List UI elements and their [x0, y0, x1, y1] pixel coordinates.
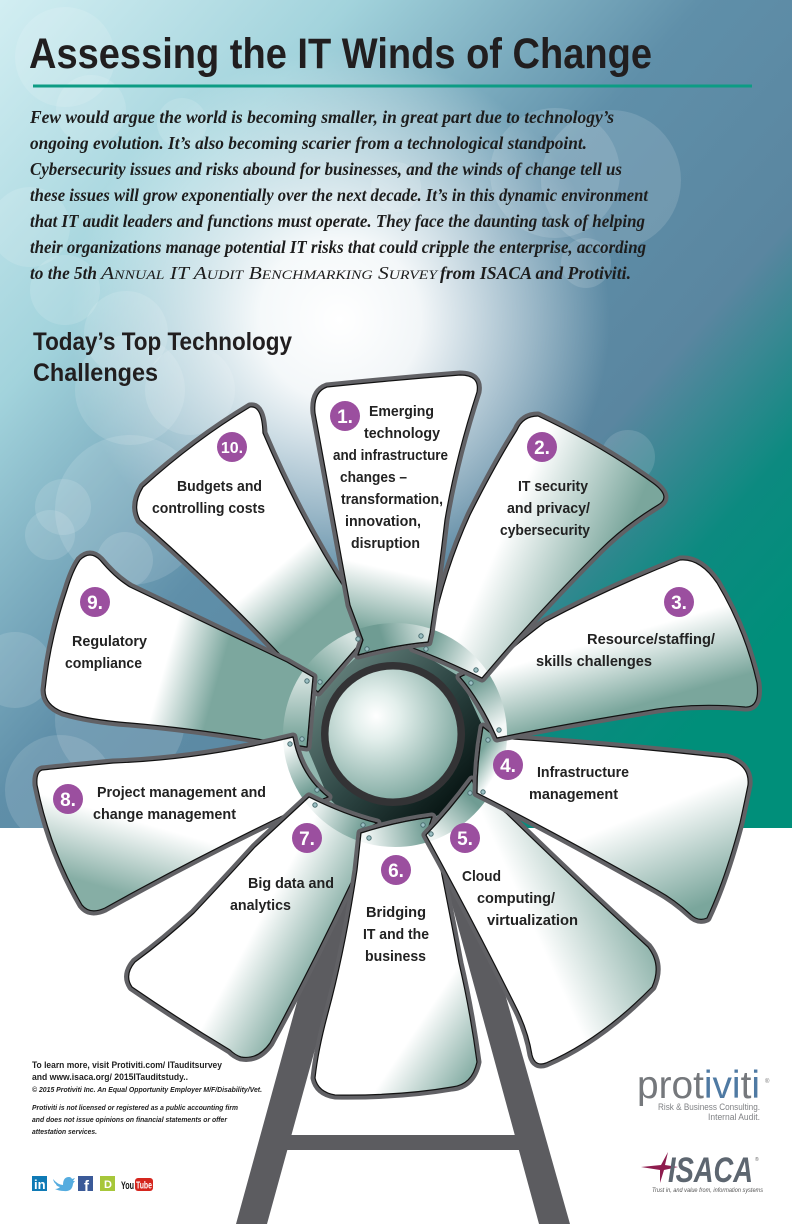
- challenge 9: [65, 587, 148, 672]
- logo: protiviti: Risk & Business Consulting.: [658, 1102, 760, 1112]
- challenge 1: innovation,: [345, 513, 421, 530]
- logo: ISACA: [641, 1151, 763, 1194]
- challenge 8: [53, 784, 266, 823]
- challenge 5: virtualization: [487, 912, 578, 929]
- rivets: [288, 634, 501, 840]
- footer text: and does not issue opinions on financial statements or offer: [32, 1115, 228, 1124]
- challenge 6: [363, 855, 429, 965]
- blades: [37, 375, 758, 1095]
- logo: protiviti: [637, 1064, 770, 1122]
- blade 7: [129, 797, 377, 1057]
- logo: ISACA: Trust in, and value from, information systems: [652, 1188, 763, 1194]
- challenge 1: technology: [364, 425, 441, 442]
- challenge 7: Big data and: [248, 875, 334, 892]
- challenge 1: changes –: [340, 469, 407, 486]
- challenge 6: business: [365, 948, 426, 965]
- intro paragraph: their organizations manage potential IT risks that could cripple the enterprise, according: [30, 237, 646, 257]
- challenge 2: 2.: [534, 438, 550, 459]
- icon: protiviti p: D: [104, 1179, 112, 1191]
- challenge 7: 7.: [299, 829, 315, 850]
- footer text: Protiviti is not licensed or registered as a public accounting firm: [32, 1103, 238, 1112]
- logo: protiviti: ®: [765, 1078, 770, 1085]
- social icons: [32, 1176, 153, 1195]
- challenge 4: 4.: [500, 756, 516, 777]
- challenge 3: Resource/staffing/: [587, 631, 716, 648]
- challenge 1: [330, 401, 448, 552]
- footer text: [32, 1060, 262, 1136]
- blade 10: [137, 407, 363, 692]
- blade 5: [426, 780, 656, 1064]
- icon: facebook: f: [84, 1178, 90, 1195]
- challenge 2: [500, 432, 591, 539]
- icon: youtube: Tube: [136, 1180, 152, 1192]
- challenge 1: and infrastructure: [333, 447, 448, 464]
- intro paragraph: to the 5th: [30, 263, 97, 283]
- challenge 10: controlling costs: [152, 500, 265, 517]
- logo: protiviti: Internal Audit.: [708, 1112, 760, 1122]
- challenge 2: cybersecurity: [500, 522, 591, 539]
- intro paragraph: that IT audit leaders and functions must operate. They face the daunting task of helping: [30, 211, 645, 231]
- challenge 9: compliance: [65, 655, 142, 672]
- challenge 1: Emerging: [369, 403, 434, 420]
- intro paragraph: [29, 107, 649, 283]
- challenge 1: transformation,: [341, 491, 443, 508]
- blade 1: [315, 375, 477, 655]
- footer text: © 2015 Protiviti Inc. An Equal Opportunity Employer M/F/Disability/Vet.: [32, 1085, 262, 1094]
- challenge 5: 5.: [457, 829, 473, 850]
- challenge 3: [536, 587, 716, 670]
- challenge 8: Project management and: [97, 784, 266, 801]
- blade 3: [460, 560, 758, 738]
- section heading: Challenges: [33, 359, 158, 387]
- challenge 6: Bridging: [366, 904, 426, 921]
- intro paragraph: ongoing evolution. It’s also becoming scarier from a technological standpoint.: [30, 133, 587, 153]
- logo: ISACA: ISACA: [668, 1151, 753, 1190]
- challenge 8: 8.: [60, 790, 76, 811]
- intro paragraph: Annual IT Audit Benchmarking Survey: [100, 263, 439, 283]
- blade 4: [477, 727, 748, 919]
- footer text: To learn more, visit Protiviti.com/ ITauditsurvey: [32, 1060, 223, 1071]
- footer text: and www.isaca.org/ 2015ITauditstudy..: [32, 1072, 188, 1083]
- challenge 6: IT and the: [363, 926, 429, 943]
- challenge 3: skills challenges: [536, 653, 652, 670]
- intro paragraph: Few would argue the world is becoming smaller, in great part due to technology’s: [29, 107, 614, 127]
- icon: youtube: [121, 1178, 153, 1192]
- intro paragraph: these issues will grow exponentially over the next decade. It’s in this dynamic environment: [30, 185, 649, 205]
- challenge 1: disruption: [351, 535, 420, 552]
- challenge 4: [493, 750, 629, 803]
- intro paragraph: Cybersecurity issues and risks abound for businesses, and the winds of change tell us: [30, 159, 622, 179]
- section heading: Today’s Top Technology: [33, 328, 292, 356]
- blade 9: [45, 555, 313, 747]
- challenge 6: 6.: [388, 861, 404, 882]
- logo: ISACA: ®: [755, 1156, 759, 1163]
- challenge 3: 3.: [671, 593, 687, 614]
- windmill tower: [236, 820, 570, 1224]
- icon: linkedin: in: [34, 1177, 46, 1192]
- challenge 9: Regulatory: [72, 633, 148, 650]
- icon: youtube: You: [121, 1180, 134, 1192]
- title: Assessing the IT Winds of Change: [29, 30, 652, 78]
- section heading: [33, 328, 292, 387]
- challenge 9: 9.: [87, 593, 103, 614]
- challenge 10: [152, 432, 265, 517]
- challenge 5: [450, 823, 578, 929]
- challenge 10: Budgets and: [177, 478, 262, 495]
- blade 2: [413, 416, 664, 678]
- intro paragraph: from ISACA and Protiviti.: [440, 263, 631, 283]
- blade 8: [37, 737, 328, 911]
- challenge 5: computing/: [477, 890, 556, 907]
- challenge 10: 10.: [221, 440, 243, 457]
- windmill hub: [283, 623, 507, 847]
- icon: twitter: [53, 1177, 75, 1191]
- challenge 5: Cloud: [462, 868, 501, 885]
- challenge 7: analytics: [230, 897, 291, 914]
- challenge 2: IT security: [518, 478, 589, 495]
- challenge 2: and privacy/: [507, 500, 591, 517]
- challenge 1: 1.: [337, 407, 353, 428]
- challenge 7: [230, 823, 334, 914]
- title underline: [33, 84, 752, 88]
- logo: protiviti: protiviti: [637, 1064, 760, 1107]
- challenge 4: Infrastructure: [537, 764, 629, 781]
- blade 6: [315, 817, 477, 1095]
- challenge 4: management: [529, 786, 618, 803]
- footer text: attestation services.: [32, 1127, 97, 1136]
- challenge 8: change management: [93, 806, 236, 823]
